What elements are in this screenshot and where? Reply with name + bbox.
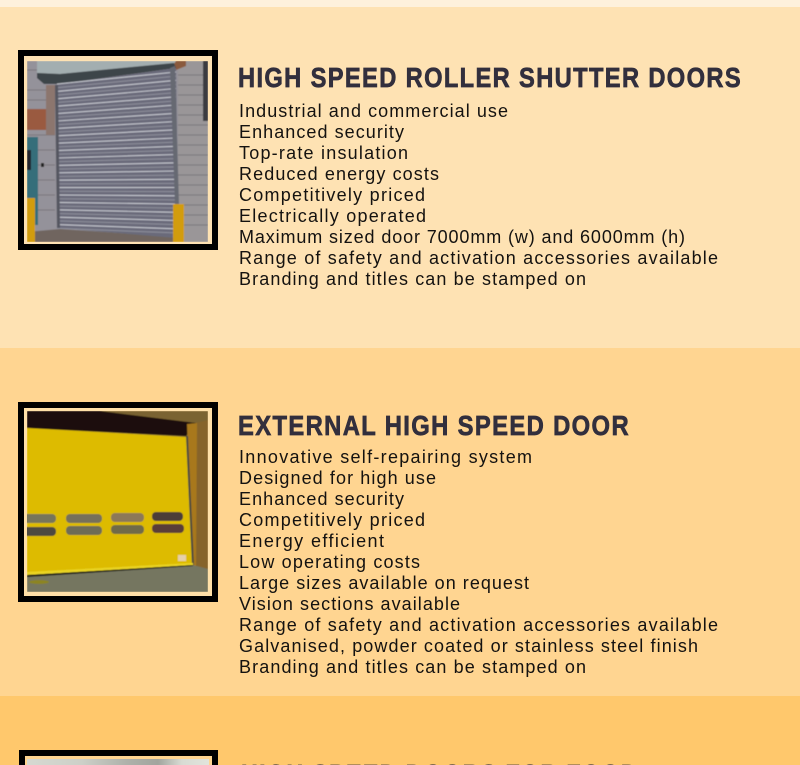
- feature list: roller shutter doors: Enhanced security: [239, 122, 404, 142]
- feature list: roller shutter doors: Reduced energy costs: [239, 164, 439, 184]
- feature list: external high speed door: Vision sections available: [239, 594, 460, 614]
- feature list: external high speed door: [239, 447, 718, 677]
- photo frame: external high speed door: [18, 402, 218, 602]
- feature list: external high speed door: Innovative self-repairing system: [239, 447, 532, 467]
- feature list: roller shutter doors: Electrically operated: [239, 206, 426, 226]
- feature list: roller shutter doors: Branding and titles can be stamped on: [239, 269, 586, 289]
- photo frame: roller shutter door: [18, 50, 218, 250]
- feature list: roller shutter doors: Maximum sized door 7000mm (w) and 6000mm (h): [239, 227, 685, 247]
- feature list: external high speed door: Branding and titles can be stamped on: [239, 657, 586, 677]
- feature list: external high speed door: Enhanced security: [239, 489, 404, 509]
- feature list: roller shutter doors: Industrial and commercial use: [239, 101, 508, 121]
- heading: external high speed door: EXTERNAL HIGH SPEED DOOR: [238, 410, 630, 441]
- feature list: roller shutter doors: Range of safety and activation accessories available: [239, 248, 718, 268]
- feature list: external high speed door: Designed for high use: [239, 468, 436, 488]
- feature list: external high speed door: Energy efficient: [239, 531, 384, 551]
- feature list: roller shutter doors: Top-rate insulation: [239, 143, 408, 163]
- feature list: external high speed door: Competitively priced: [239, 510, 425, 530]
- feature list: external high speed door: Galvanised, powder coated or stainless steel finish: [239, 636, 698, 656]
- feature list: external high speed door: Large sizes available on request: [239, 573, 529, 593]
- panel: high speed roller shutter doors: [0, 7, 800, 348]
- top strip: [0, 0, 800, 7]
- photo frame: food door: [19, 750, 218, 765]
- feature list: roller shutter doors: [239, 101, 718, 289]
- feature list: external high speed door: Range of safety and activation accessories available: [239, 615, 718, 635]
- feature list: external high speed door: Low operating costs: [239, 552, 420, 572]
- feature list: roller shutter doors: Competitively priced: [239, 185, 425, 205]
- panel: high speed doors for food: [0, 696, 800, 765]
- panel: external high speed door: [0, 348, 800, 696]
